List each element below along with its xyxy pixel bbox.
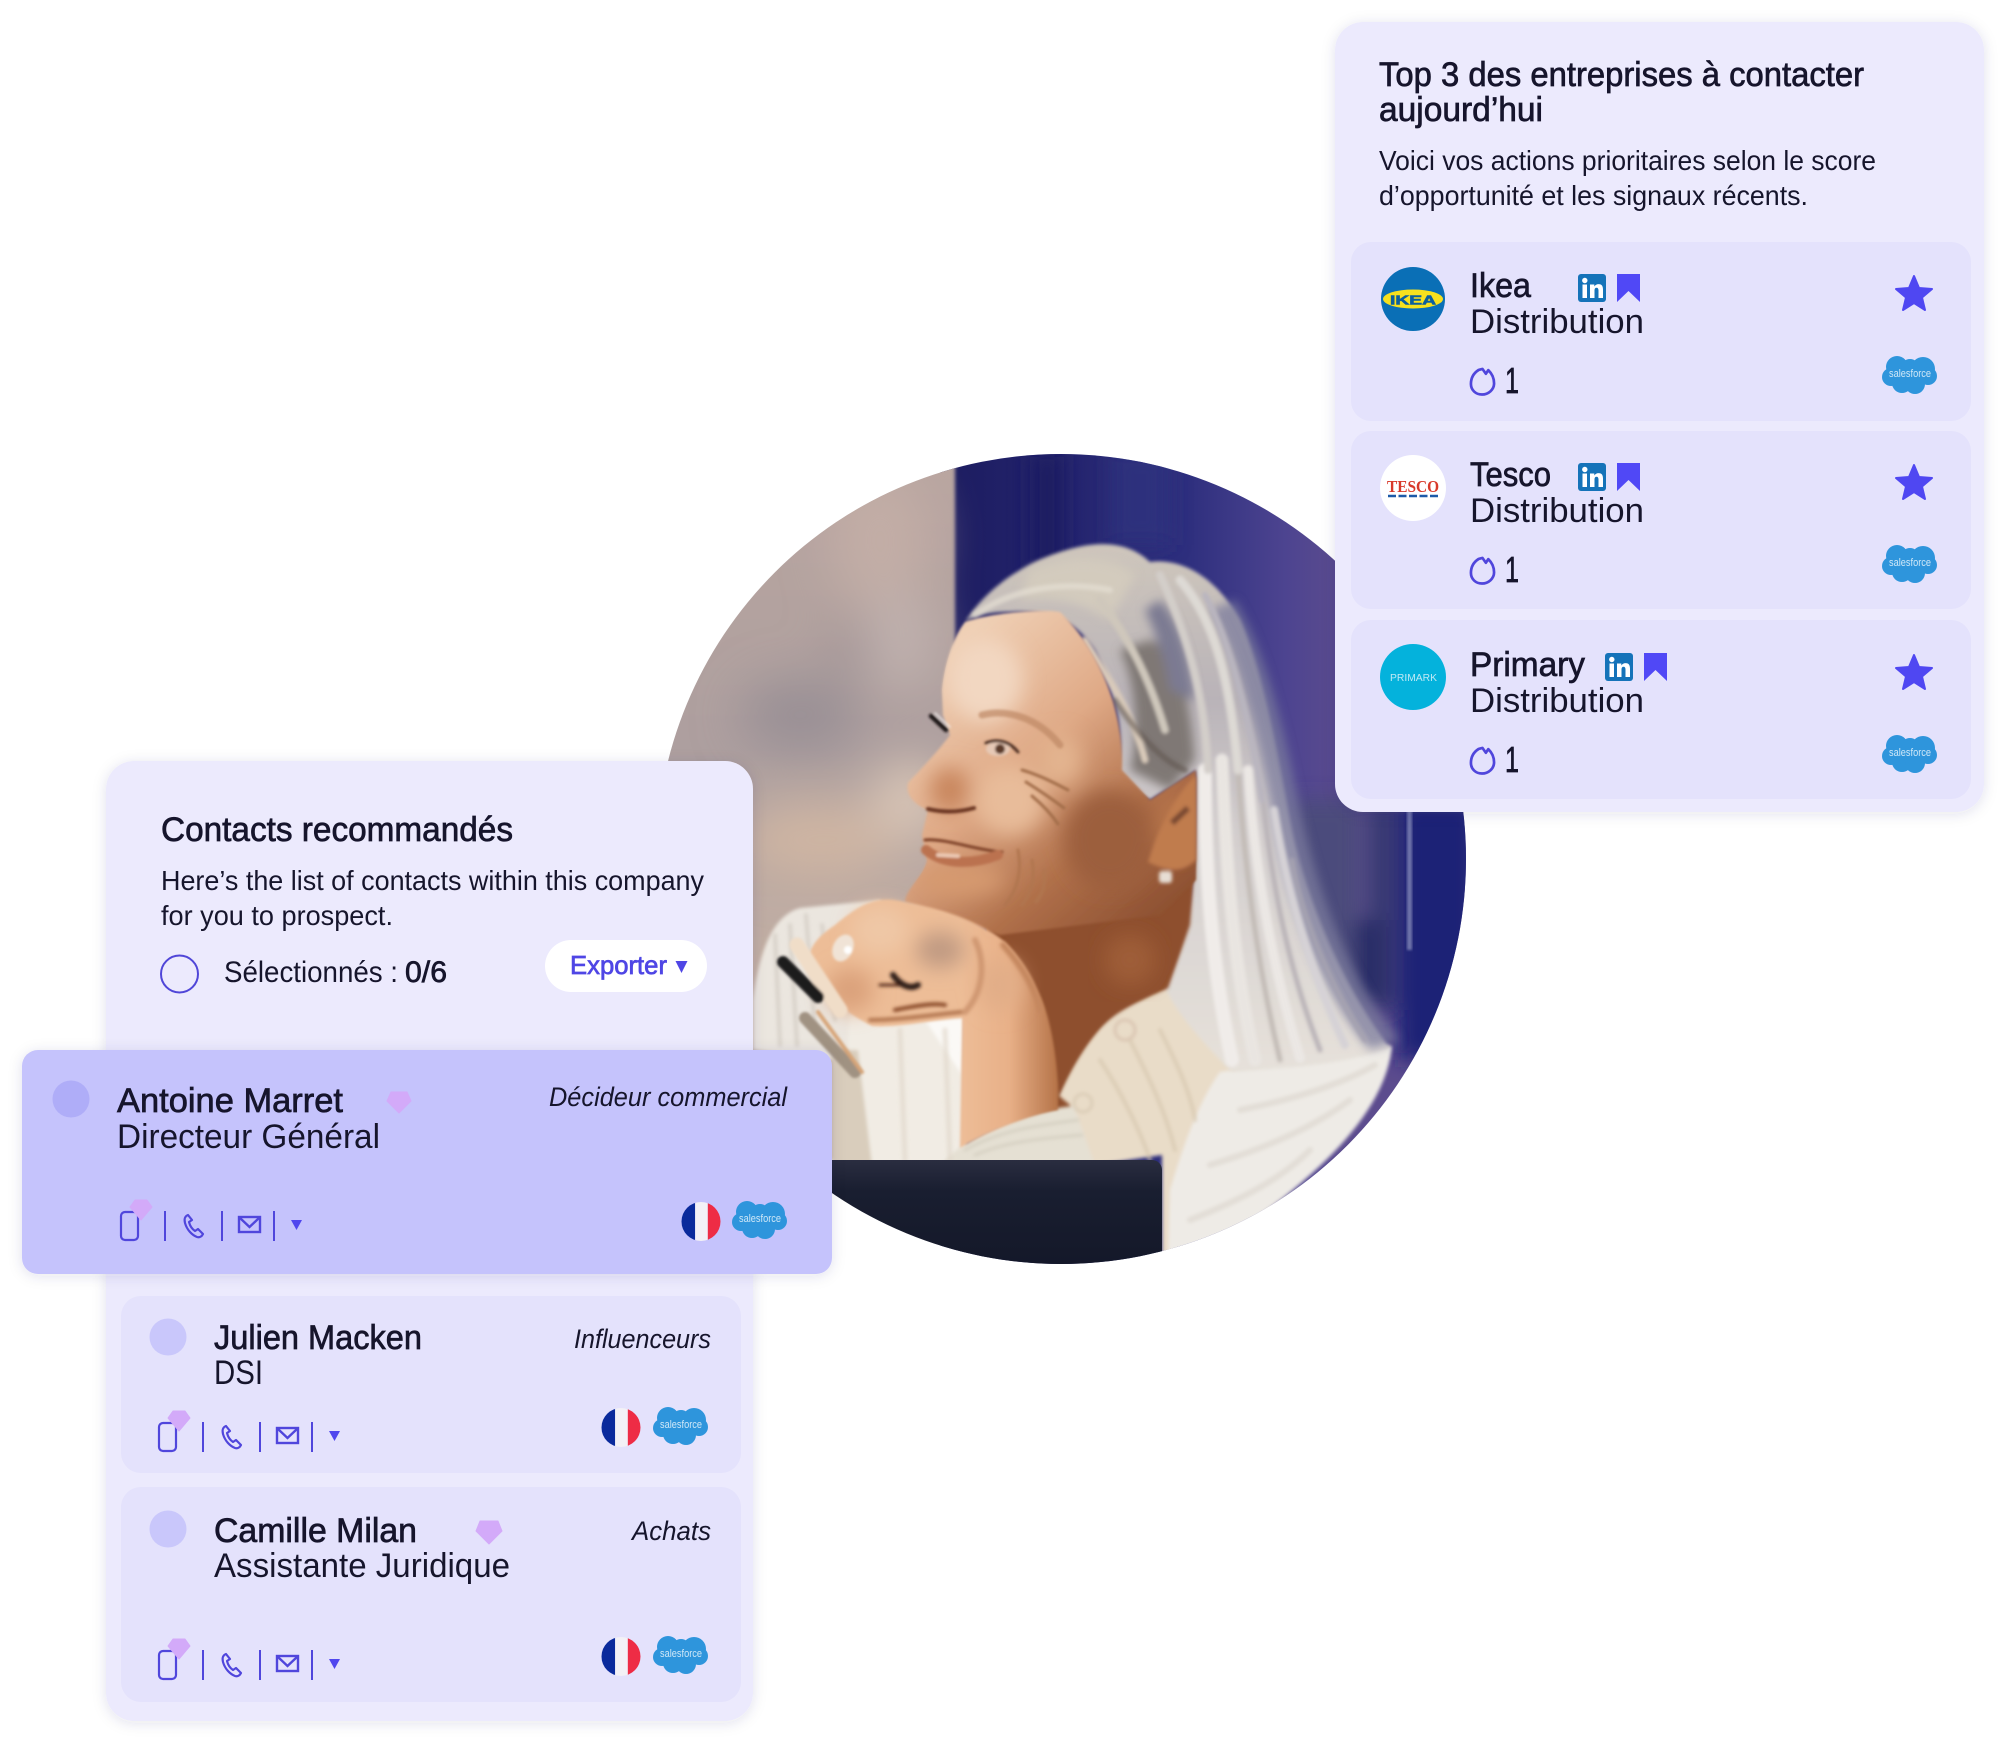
icon: star (1896, 465, 1932, 499)
blouse and sleeves (753, 900, 1392, 1262)
company name and sector (1470, 267, 1644, 341)
description text: for you to prospect. (161, 900, 393, 931)
hair (965, 544, 1390, 1072)
description text (161, 865, 704, 931)
score: opportunity count: 1 (1505, 360, 1519, 401)
icon: French flag (602, 1408, 640, 1447)
laptop (832, 1160, 1162, 1264)
company name and sector: Distribution (1470, 303, 1644, 341)
logo: salesforce (653, 1636, 708, 1674)
panel: recommended contacts (106, 761, 753, 1721)
neck and arm (1058, 860, 1198, 1097)
logo: Ikea (1381, 267, 1445, 331)
panel: top 3 companies (1335, 22, 1984, 812)
heading: top 3: Top 3 des entreprises à contacter (1379, 56, 1864, 94)
select dot (52, 1080, 90, 1118)
company name and sector: Primary (1470, 646, 1585, 684)
role label: Influenceurs (574, 1324, 711, 1354)
contact row: Julien Macken (121, 1296, 741, 1473)
score: opportunity count (1471, 739, 1519, 780)
logo: salesforce (1882, 545, 1937, 583)
hand (808, 900, 1058, 1148)
score: opportunity count (1471, 549, 1519, 590)
button: export: Exporter (570, 950, 667, 980)
heading: top 3: aujourd’hui (1379, 91, 1543, 129)
heading: contacts: Contacts recommandés (161, 811, 513, 849)
icons: linkedin and bookmark (1578, 463, 1640, 491)
company name and sector (1470, 646, 1644, 720)
logo: salesforce: salesforce (1889, 557, 1931, 569)
base tones behind body (986, 886, 1192, 1110)
logo: Primark (1380, 644, 1446, 710)
contact row: Camille Milan (121, 1487, 741, 1702)
logo: salesforce: salesforce (1889, 368, 1931, 380)
selected counter: Sélectionnés : (224, 956, 398, 989)
company name and sector: Ikea (1470, 267, 1531, 305)
contact name and job title: DSI (214, 1354, 263, 1392)
score: opportunity count: 1 (1505, 549, 1519, 590)
description text: Voici vos actions prioritaires selon le score (1379, 145, 1876, 176)
role label: Décideur commercial (549, 1082, 788, 1112)
logo: Ikea: IKEA (1390, 292, 1437, 308)
icon: diamond (387, 1092, 411, 1113)
contact name and job title (214, 1319, 422, 1392)
facial details (925, 713, 1068, 905)
logo: salesforce: salesforce (660, 1419, 702, 1431)
icons: contact channels (159, 1639, 340, 1680)
logo: Primark: PRIMARK (1390, 673, 1437, 684)
logo: salesforce (653, 1407, 708, 1445)
face (905, 611, 1196, 935)
contact name and job title (214, 1512, 510, 1585)
icon: French flag (602, 1637, 640, 1676)
contact name and job title: Directeur Général (117, 1118, 380, 1156)
logo: salesforce (1882, 356, 1937, 394)
logo: salesforce: salesforce (739, 1213, 781, 1225)
checkbox: select all (161, 956, 198, 992)
contact name and job title: Julien Macken (214, 1319, 422, 1357)
contact name and job title: Antoine Marret (117, 1082, 344, 1120)
icon: diamond (476, 1521, 502, 1544)
icons: contact channels (159, 1411, 340, 1452)
icon: French flag (682, 1202, 720, 1241)
score: opportunity count (1471, 360, 1519, 401)
logo: Tesco (1380, 455, 1446, 521)
button: export (545, 940, 707, 992)
icon: star (1896, 655, 1932, 689)
contact name and job title: Assistante Juridique (214, 1547, 510, 1585)
photo: smiling woman in a circle (640, 440, 1480, 1290)
company row: Tesco (1351, 431, 1971, 609)
company row: Primary (1351, 620, 1971, 799)
contact name and job title: Camille Milan (214, 1512, 417, 1550)
icons: contact channels (121, 1200, 302, 1241)
ear and earring (1148, 775, 1196, 883)
selected counter: 0/6 (405, 956, 447, 989)
company row: Ikea (1351, 242, 1971, 421)
select dot (150, 1510, 186, 1548)
company name and sector: Distribution (1470, 682, 1644, 720)
description text (1379, 145, 1876, 211)
select dot (150, 1318, 186, 1356)
score: opportunity count: 1 (1505, 739, 1519, 780)
company name and sector: Tesco (1470, 456, 1551, 494)
logo: Tesco: TESCO (1387, 477, 1439, 496)
pen (783, 945, 862, 1072)
role label: Achats (630, 1516, 711, 1546)
description text: Here’s the list of contacts within this company (161, 865, 704, 896)
logo: salesforce: salesforce (660, 1648, 702, 1660)
logo: salesforce (732, 1201, 787, 1239)
icons: linkedin and bookmark (1605, 653, 1667, 681)
contact name and job title (117, 1082, 380, 1156)
heading: top 3 (1379, 56, 1864, 129)
description text: d’opportunité et les signaux récents. (1379, 180, 1808, 211)
company name and sector (1470, 456, 1644, 530)
company name and sector: Distribution (1470, 492, 1644, 530)
ring (831, 934, 855, 963)
icon: star (1896, 276, 1932, 310)
contact row: Antoine Marret highlighted (22, 1050, 832, 1274)
icons: linkedin and bookmark (1578, 274, 1640, 302)
logo: salesforce: salesforce (1889, 747, 1931, 759)
logo: salesforce (1882, 735, 1937, 773)
